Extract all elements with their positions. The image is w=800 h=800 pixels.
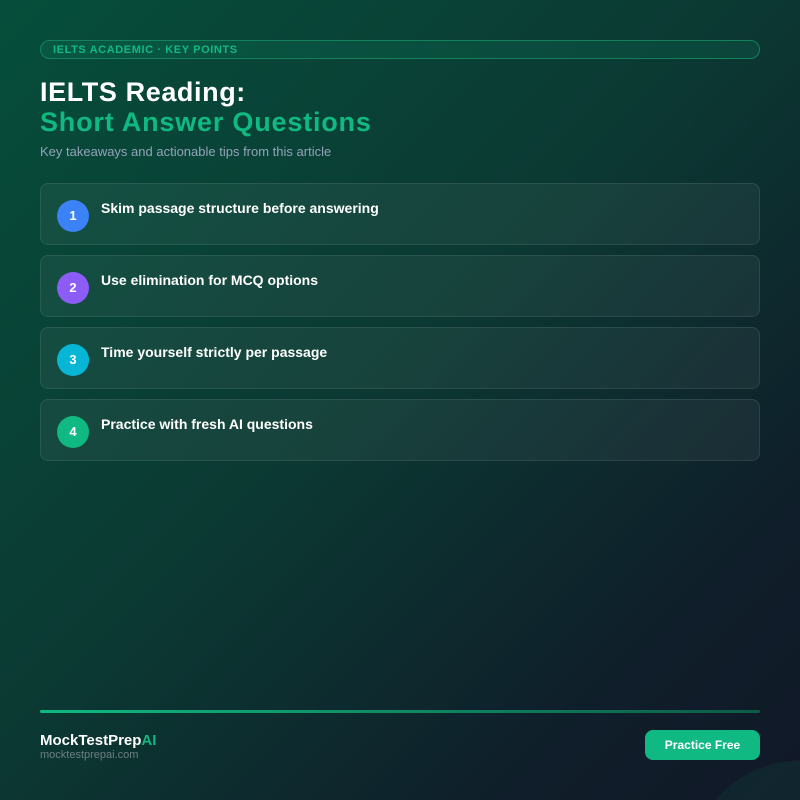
card 2: Use elimination for MCQ options: [101, 272, 318, 288]
card 1: Skim passage structure before answering: [101, 200, 379, 216]
card 1: [40, 183, 760, 245]
title line 2: Short Answer Questions: [40, 107, 372, 137]
card 4: 4: [69, 424, 77, 439]
button: Practice Free: [665, 738, 740, 752]
tag pill: [40, 40, 760, 59]
footer divider: [40, 710, 760, 713]
card 2: [40, 255, 760, 317]
card 3: [40, 327, 760, 389]
button: [645, 730, 760, 760]
tag pill: IELTS ACADEMIC · KEY POINTS: [53, 44, 238, 56]
card 2: 2: [69, 280, 77, 295]
url: mocktestprepai.com: [40, 749, 138, 761]
decorative circle: [690, 760, 800, 800]
brand: MockTestPrepAI: [40, 732, 156, 749]
subtitle: Key takeaways and actionable tips from this article: [40, 144, 331, 159]
card 1: 1: [69, 208, 77, 223]
title line 1: IELTS Reading:: [40, 77, 246, 107]
card 4: [40, 399, 760, 461]
card 3: 3: [69, 352, 77, 367]
card 4: Practice with fresh AI questions: [101, 416, 313, 432]
card 3: Time yourself strictly per passage: [101, 344, 327, 360]
